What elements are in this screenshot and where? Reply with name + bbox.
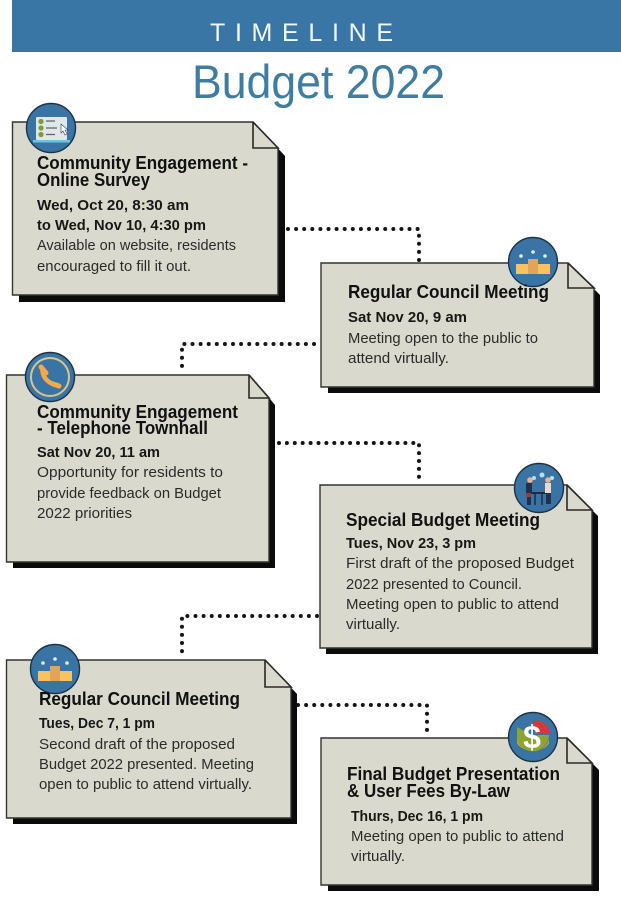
heading: Regular Council Meeting — [348, 282, 549, 302]
panel: special budget meeting: 2022 presented to Council. — [346, 576, 522, 593]
header banner: TIMELINE — [210, 19, 393, 47]
date: Sat Nov 20, 9 am — [348, 309, 467, 326]
panel: community engagement online survey: to Wed, Nov 10, 4:30 pm — [37, 217, 206, 234]
panel: regular council meeting dec 7: open to public to attend virtually. — [39, 776, 252, 793]
header banner — [12, 0, 621, 52]
panel: community engagement telephone townhall: provide feedback on Budget — [37, 485, 222, 502]
panel: final budget presentation — [321, 712, 599, 891]
icon: meeting people — [514, 464, 564, 512]
panel: final budget presentation: & User Fees By-Law — [347, 781, 511, 801]
icon: budget pie with dollar — [508, 712, 558, 762]
connector: card 1 to card 2 — [288, 229, 419, 263]
description: Opportunity for residents to — [37, 464, 223, 481]
panel: community engagement telephone townhall — [6, 352, 275, 568]
heading: Regular Council Meeting — [39, 689, 240, 709]
date: Thurs, Dec 16, 1 pm — [351, 808, 483, 825]
icon: podium — [30, 644, 80, 694]
icon: online survey — [26, 104, 76, 152]
connector: card 4 to card 5 — [182, 616, 317, 656]
panel: regular council meeting dec 7: Budget 2022 presented. Meeting — [39, 756, 254, 773]
panel: final budget presentation: virtually. — [351, 848, 405, 865]
icon: podium — [508, 238, 558, 286]
heading: Special Budget Meeting — [346, 510, 540, 530]
description: Meeting open to public to attend — [351, 828, 564, 845]
description: Meeting open to the public to — [348, 330, 538, 347]
panel: special budget meeting: virtually. — [346, 616, 400, 633]
description: First draft of the proposed Budget — [346, 555, 575, 572]
connector: card 3 to card 4 — [279, 443, 419, 478]
panel: community engagement telephone townhall: - Telephone Townhall — [37, 418, 208, 438]
heading: Community Engagement - — [37, 153, 248, 173]
date: Sat Nov 20, 11 am — [37, 444, 160, 461]
panel: regular council meeting dec 7 — [6, 644, 297, 824]
panel: community engagement online survey — [12, 104, 285, 302]
title: Budget 2022 — [192, 55, 445, 108]
panel: regular council meeting nov 20 — [321, 238, 600, 393]
panel: special budget meeting — [320, 464, 598, 654]
panel: community engagement online survey: Online Survey — [37, 170, 150, 190]
heading: Final Budget Presentation — [347, 764, 560, 784]
date: Tues, Nov 23, 3 pm — [346, 535, 476, 552]
icon: telephone — [26, 352, 74, 402]
description: Available on website, residents — [37, 237, 236, 254]
connector: card 5 to card 6 — [298, 705, 427, 733]
connector: card 2 to card 3 — [182, 344, 314, 372]
panel: special budget meeting: Meeting open to public to attend — [346, 596, 559, 613]
panel: community engagement online survey: encouraged to fill it out. — [37, 258, 191, 275]
panel: regular council meeting nov 20: attend virtually. — [348, 350, 449, 367]
date: Wed, Oct 20, 8:30 am — [37, 197, 189, 214]
icon: budget pie with dollar: $ — [523, 719, 541, 755]
heading: Community Engagement — [37, 402, 238, 422]
date: Tues, Dec 7, 1 pm — [39, 715, 155, 732]
description: Second draft of the proposed — [39, 736, 235, 753]
panel: community engagement telephone townhall: 2022 priorities — [37, 505, 132, 522]
